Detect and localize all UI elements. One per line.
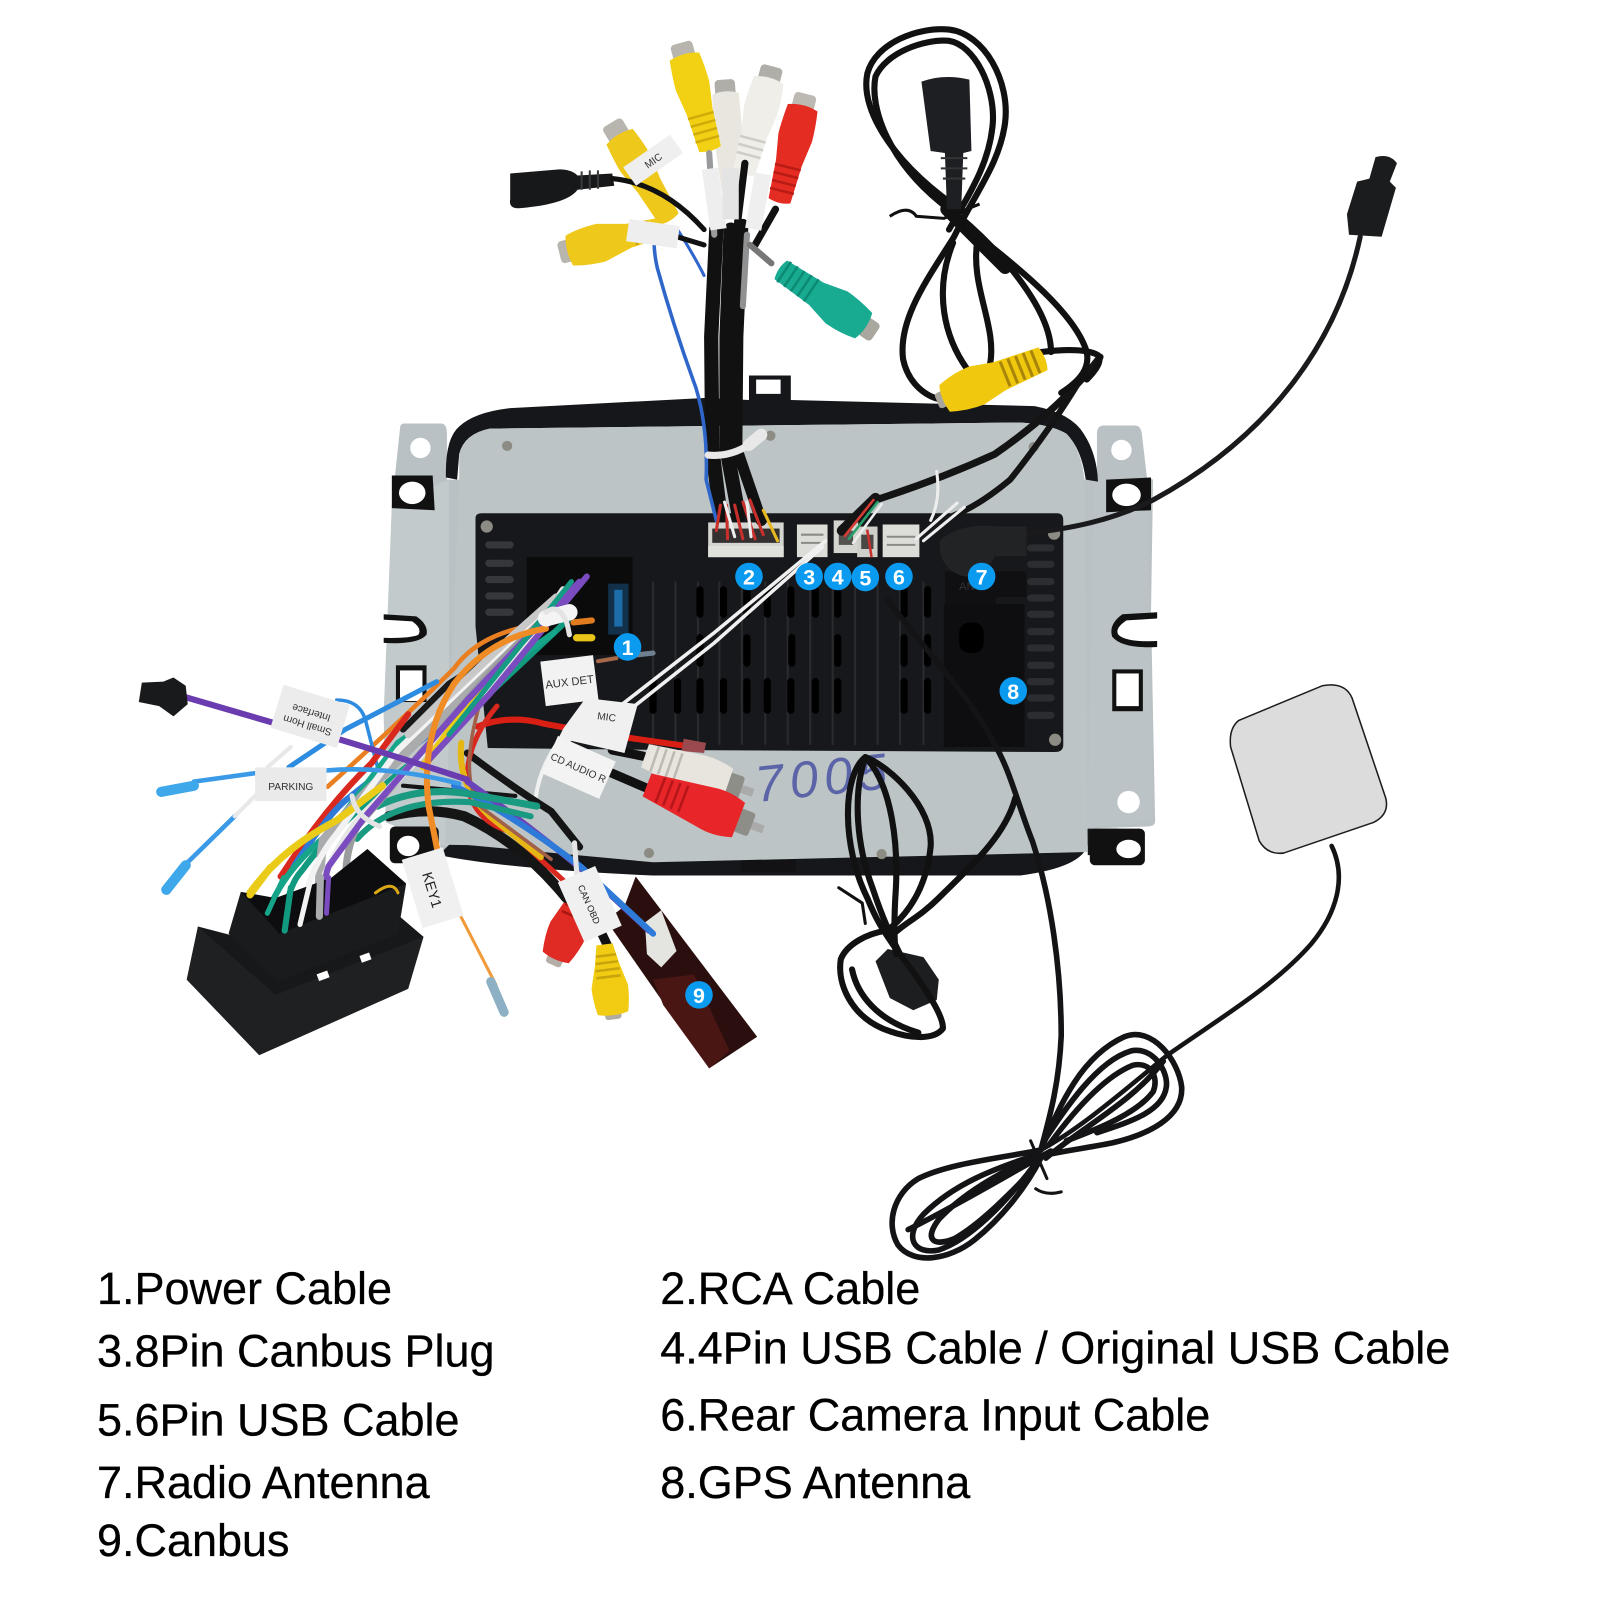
port 4 block — [834, 520, 858, 553]
plug: teal — [768, 253, 886, 350]
white CD audio cable — [536, 541, 826, 799]
tag: audio upper: MIC — [596, 711, 616, 725]
badge 1: 1 — [622, 636, 634, 660]
icon: GPS antenna patch — [1230, 685, 1387, 853]
badge 9 — [685, 981, 713, 1009]
aux det brown wire — [598, 658, 616, 661]
plug: white rear — [710, 79, 747, 193]
plug: white — [727, 62, 789, 179]
power harness wires — [161, 577, 653, 1012]
legend item 7: 7.Radio Antenna — [97, 1457, 431, 1508]
badge 6 — [885, 563, 913, 590]
panel: head unit rear — [380, 376, 1159, 876]
plug: yellow lower — [555, 209, 665, 272]
raised block — [229, 849, 406, 982]
icon: USB jack — [890, 77, 980, 218]
label: PARKING — [255, 767, 327, 801]
orange KEY1 wire on top of bundle — [427, 629, 546, 867]
port 2 colored wires — [716, 500, 763, 539]
legend item 1: 1.Power Cable — [97, 1263, 392, 1314]
label: KEY1: KEY1 — [418, 870, 444, 910]
legend item 2: 2.RCA Cable — [660, 1263, 920, 1314]
legend — [97, 1263, 1450, 1566]
label: KEY1 — [402, 847, 464, 928]
tag: CD AUDIO R: CD AUDIO R — [549, 752, 607, 786]
harness socket connector — [187, 849, 423, 1055]
module box — [606, 877, 757, 1068]
number badges — [614, 563, 1027, 1009]
badge 4 — [824, 563, 852, 590]
legend item 8: 8.GPS Antenna — [660, 1457, 971, 1508]
mounting holes and clips — [380, 438, 1159, 865]
legend item 6: 6.Rear Camera Input Cable — [660, 1390, 1210, 1441]
label: PARKING: PARKING — [268, 782, 313, 793]
handwritten model number: 7005 — [752, 742, 896, 813]
grey rear plate — [445, 422, 1088, 862]
label: Small Horn Interface — [270, 685, 350, 748]
radio antenna cable — [940, 156, 1397, 577]
left vents — [489, 545, 510, 612]
tag: MIC: MIC — [643, 152, 665, 171]
plug: yellow top — [664, 38, 727, 156]
plug: red — [762, 90, 823, 207]
label: AUX DET: AUX DET — [545, 674, 595, 692]
badge 2 — [735, 563, 763, 590]
purple lead from small plug — [185, 697, 467, 780]
black wires — [389, 811, 566, 898]
badge 2: 2 — [743, 566, 755, 590]
zip tie on bundle — [546, 609, 569, 635]
plug on unit — [940, 526, 1027, 577]
4G recess — [944, 604, 1024, 747]
label: Small Horn Interface: Small Horn — [282, 712, 333, 737]
plug: yellow left — [596, 114, 685, 230]
panel RCA plugs — [478, 720, 771, 851]
Canbus module — [535, 877, 757, 1068]
zip tie — [708, 445, 749, 455]
legend item 5: 5.6Pin USB Cable — [97, 1395, 460, 1446]
badge 7: 7 — [976, 566, 988, 590]
black radio chassis — [476, 431, 1063, 859]
badge 5 — [852, 564, 879, 591]
label: Small Horn Interface: Interface — [291, 701, 332, 723]
wires to canbus: red yellow brown purple blue — [467, 706, 571, 888]
badge 3 — [795, 563, 823, 590]
badge 4: 4 — [832, 566, 844, 590]
USB cable loops, top right — [866, 29, 1100, 400]
white plug — [645, 910, 677, 967]
square holes — [317, 971, 330, 981]
badge 8 — [999, 677, 1027, 705]
USB coil lower — [839, 757, 1015, 1037]
badge 1 — [614, 633, 641, 661]
metal mounting bracket — [384, 423, 1155, 852]
red wire — [478, 720, 694, 747]
port 3 block — [797, 524, 828, 557]
port 2 block — [708, 522, 784, 557]
port 6 block — [883, 524, 919, 557]
label: CAN OBD — [558, 866, 622, 942]
loop RCA plug — [929, 339, 1053, 420]
port 5 block — [857, 527, 878, 557]
tag: MIC — [623, 135, 683, 186]
badge 7 — [968, 563, 995, 590]
plug: red — [535, 879, 605, 973]
plug: black audio jack — [510, 169, 614, 208]
legend item 4: 4.4Pin USB Cable / Original USB Cable — [660, 1322, 1450, 1373]
outer shell — [187, 913, 423, 1055]
fan to socket — [281, 714, 408, 877]
power socket recess — [527, 557, 633, 655]
small black plug — [139, 678, 188, 716]
black radio chassis: ANT — [959, 581, 982, 593]
screws — [481, 520, 493, 533]
badge 3: 3 — [803, 566, 815, 590]
label: AUX DET — [540, 655, 598, 706]
black stubs — [610, 750, 653, 791]
rear camera cable and USB cable into ports 4 and 6 — [842, 357, 1100, 556]
badge 6: 6 — [893, 566, 905, 590]
badge 8: 8 — [1007, 680, 1019, 704]
plug: red — [639, 764, 771, 851]
blue leads terminals — [161, 786, 194, 792]
black plastic frame — [439, 376, 1118, 876]
ribs and slots — [653, 582, 923, 745]
plug stub wires — [612, 153, 776, 263]
black RCA bundle cable — [654, 219, 778, 541]
tags below plugs — [626, 168, 771, 248]
blue lead parking — [194, 769, 459, 784]
GPS antenna and long cable — [888, 600, 1339, 1258]
orange wire to amp — [328, 624, 539, 787]
plug: yellow — [597, 923, 609, 949]
badge 5: 5 — [859, 567, 871, 591]
legend item 3: 3.8Pin Canbus Plug — [97, 1325, 495, 1376]
right vents — [1031, 548, 1051, 715]
badge 9: 9 — [693, 984, 705, 1008]
wires into socket — [250, 867, 398, 931]
cable — [1026, 237, 1360, 534]
legend item 9: 9.Canbus — [97, 1515, 290, 1566]
key1 lead — [459, 913, 496, 985]
RCA plugs top — [510, 38, 886, 350]
tag: audio upper — [551, 698, 638, 753]
blue thin wires — [289, 682, 437, 767]
plug: white — [639, 737, 760, 812]
tag: CD AUDIO R — [541, 736, 616, 799]
connector ports — [708, 520, 919, 557]
power socket wires — [577, 634, 592, 641]
label: CAN OBD: CAN OBD — [576, 883, 602, 926]
connector — [1347, 156, 1397, 237]
icon: USB plug — [876, 949, 939, 1010]
